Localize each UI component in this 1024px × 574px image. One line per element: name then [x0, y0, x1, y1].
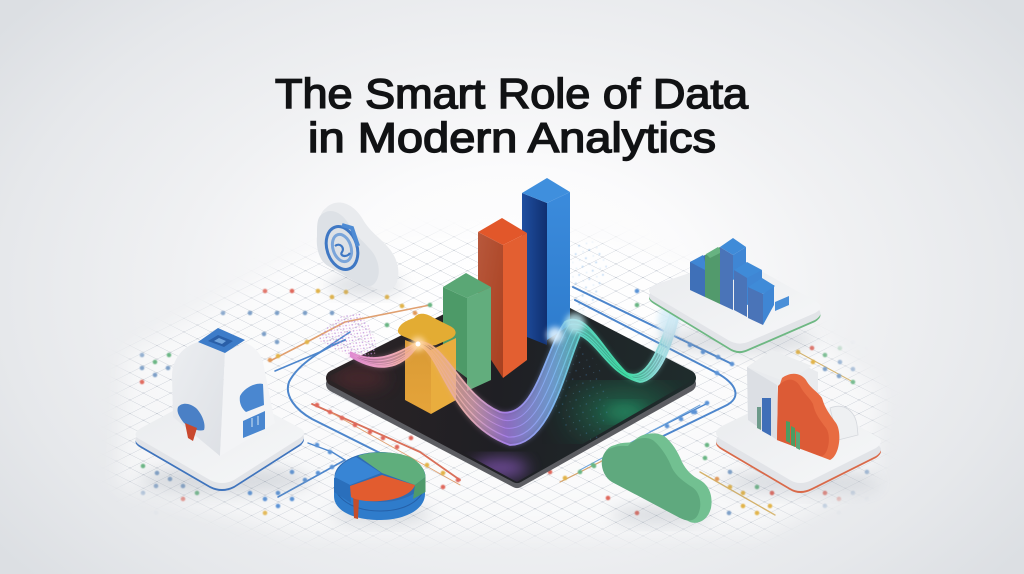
blue round icon [240, 384, 264, 412]
white roll [830, 406, 858, 440]
platform glows [332, 366, 672, 477]
flowing data wave [350, 304, 680, 445]
tray bars [690, 255, 705, 297]
tray [136, 396, 304, 491]
red stem icon [185, 423, 197, 441]
pie slice: blue [334, 457, 381, 485]
pie slice: green [358, 452, 426, 485]
kiosk body left face [172, 342, 225, 456]
bar: blue [522, 178, 570, 345]
blue square icon [243, 411, 265, 438]
panel: left white kiosk on tray [136, 328, 310, 494]
panel: lower right tray with red cloud [716, 350, 881, 494]
bar: red [478, 218, 527, 378]
small green bars on cloud [786, 421, 790, 443]
particle clusters [318, 241, 608, 442]
wave glow points [411, 337, 425, 351]
blue top tile [198, 328, 245, 353]
red cloud [777, 374, 839, 460]
data point dots [142, 291, 867, 513]
blue blob icon [177, 404, 205, 431]
icon: green cloud [602, 433, 712, 524]
bar: green [443, 273, 491, 391]
main platform [332, 288, 688, 480]
pie slice: red [350, 475, 415, 501]
bar: yellow [398, 314, 456, 414]
kiosk body right face [220, 343, 275, 456]
isometric data grid [114, 228, 886, 543]
icon: white cloud with blue ring [317, 203, 403, 295]
small blue bars [762, 398, 771, 436]
title: in Modern Analytics [308, 114, 716, 161]
connector lines [270, 287, 853, 515]
back box [747, 350, 818, 440]
chart icon: 3D pie [332, 452, 432, 524]
title [275, 70, 749, 161]
title: The Smart Role of Data [275, 70, 749, 117]
panel: right tray with bar chart [649, 238, 820, 354]
